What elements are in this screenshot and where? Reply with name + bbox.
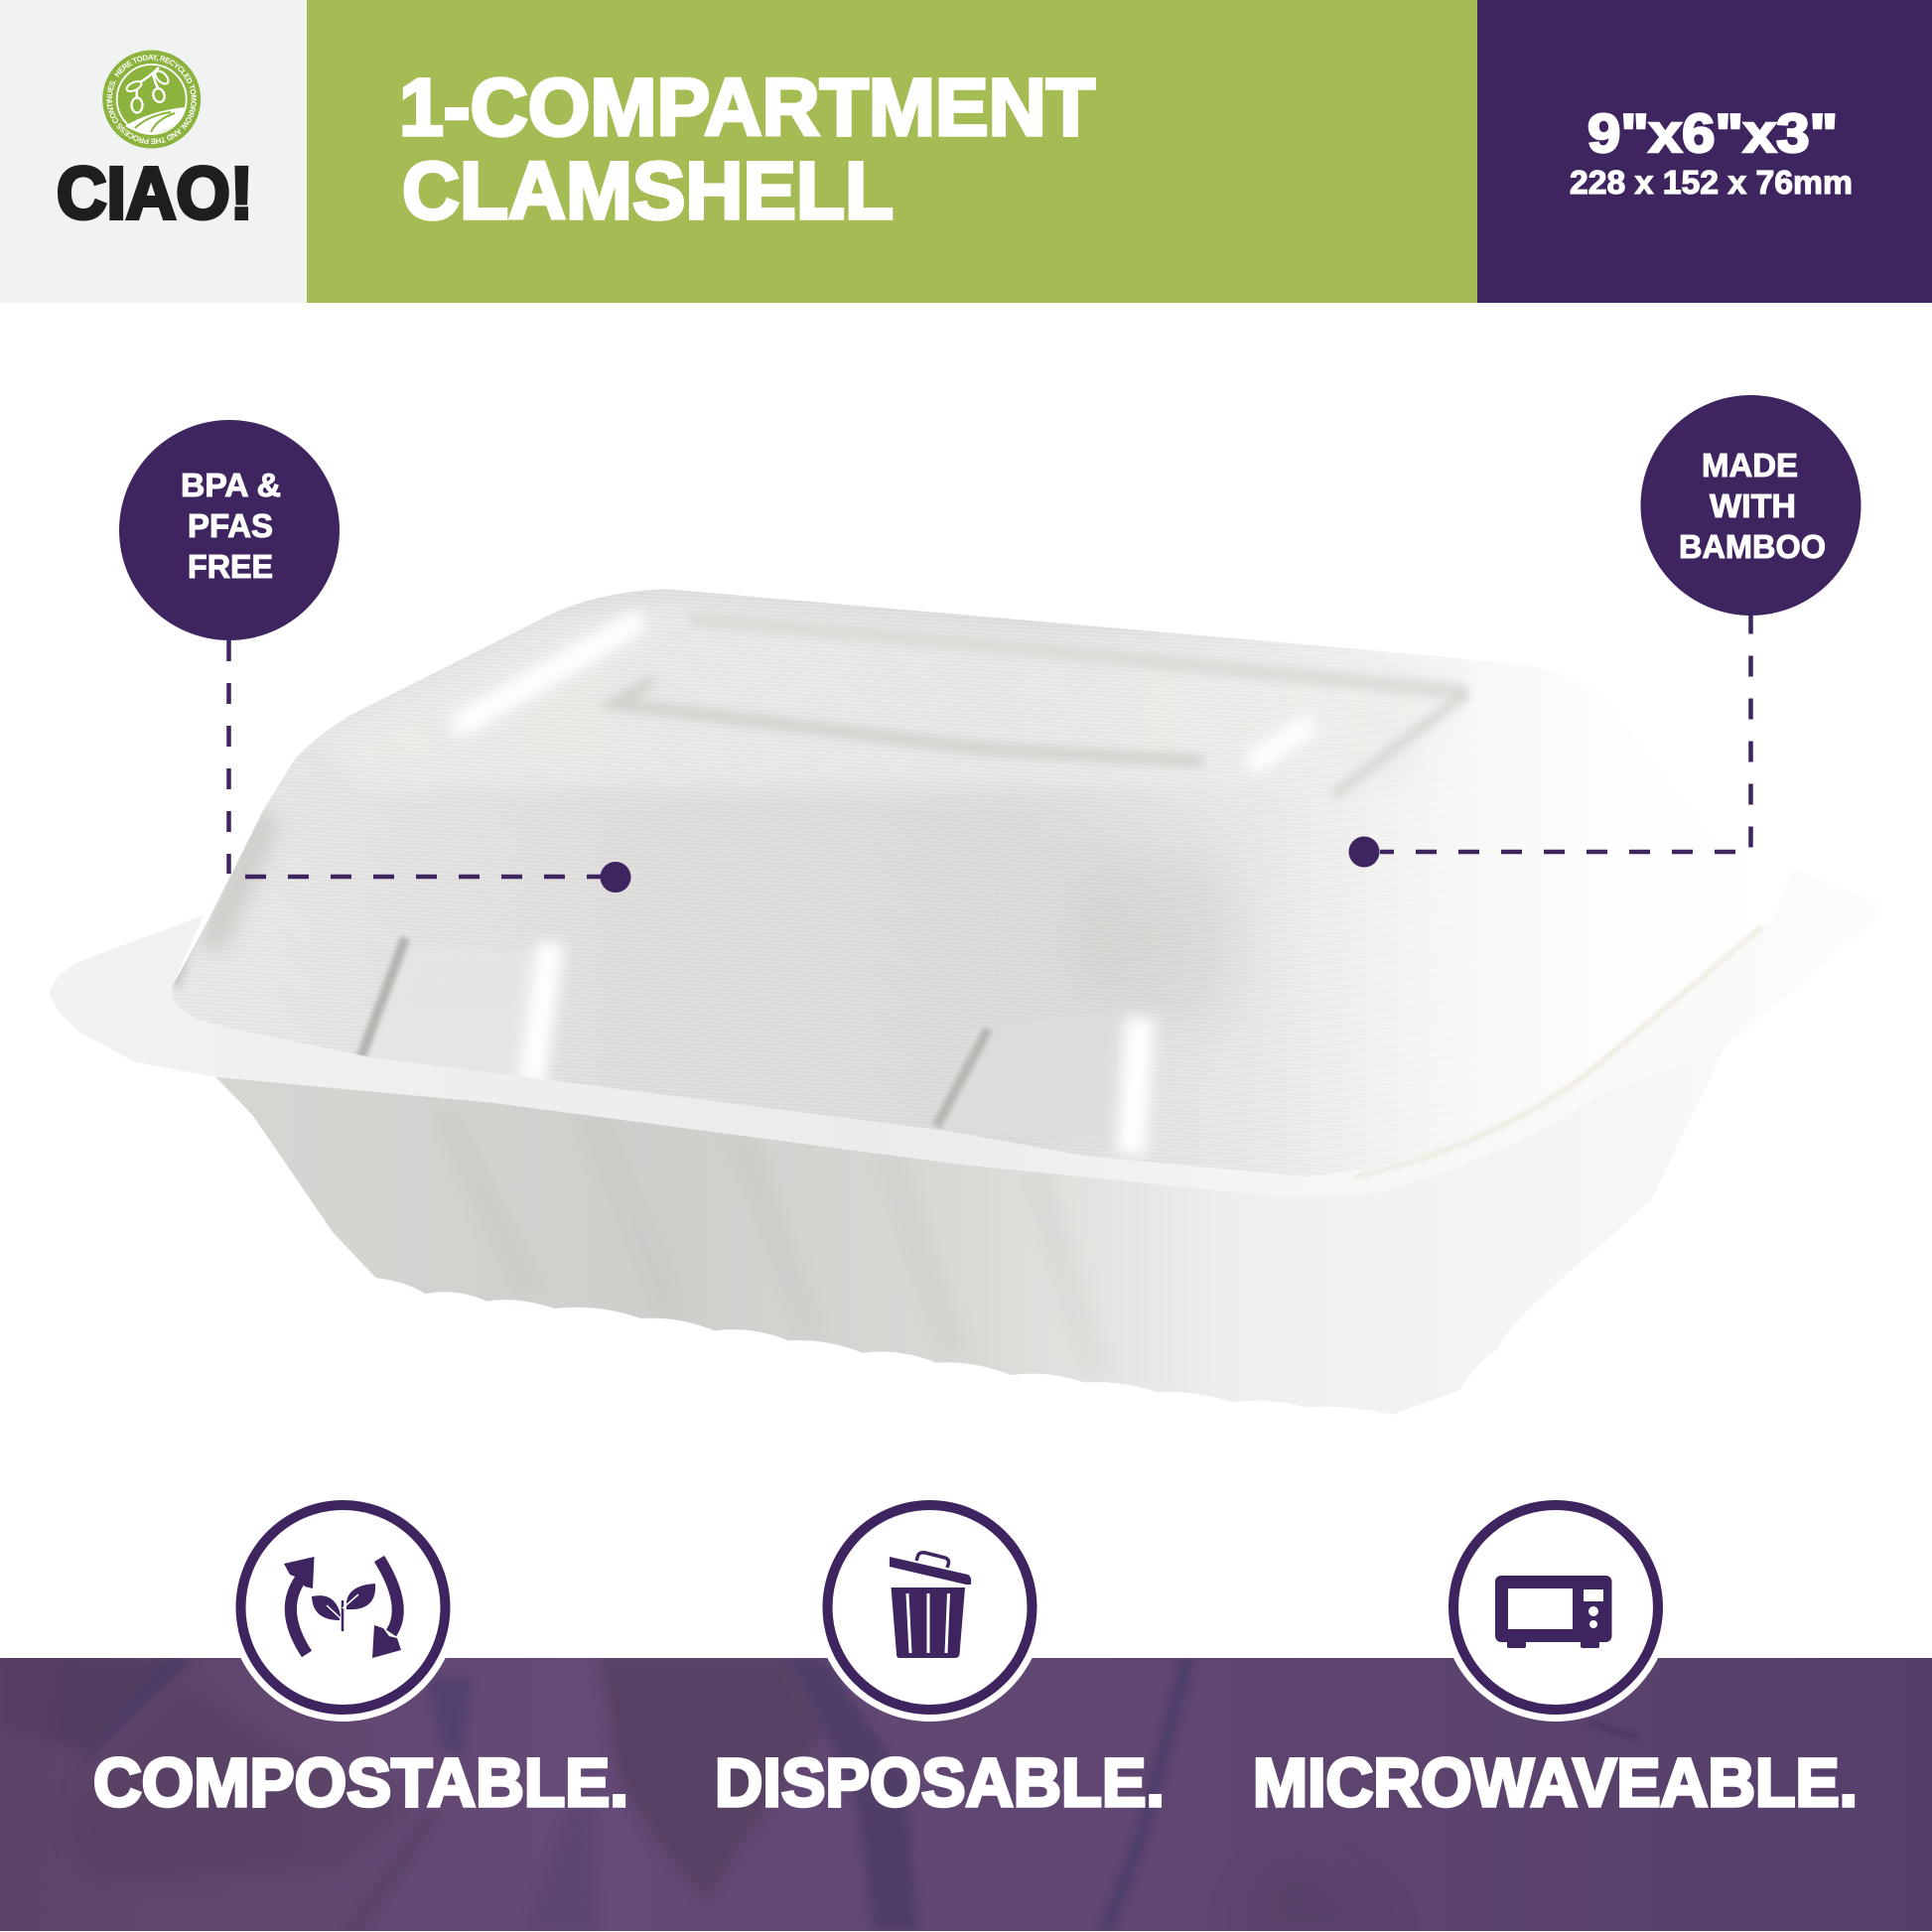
leader dot [600, 862, 631, 893]
callout text: BPA & [181, 467, 281, 503]
dimensions in inches: 9"x6"x3" [1587, 102, 1838, 164]
lid [172, 589, 1499, 1176]
callout badge [1640, 395, 1861, 616]
callout badge [119, 420, 340, 640]
leader line [1380, 614, 1751, 852]
callout text [181, 467, 281, 585]
title line 1: 1-COMPARTMENT [399, 63, 1095, 153]
callout: made with bamboo [1348, 395, 1861, 868]
logo wordmark: CIAO! [57, 152, 253, 234]
callout text [1679, 447, 1826, 565]
dimensions in millimetres: 228 x 152 x 76mm [1570, 164, 1853, 201]
callout text: MADE [1702, 447, 1798, 483]
icon badge [1442, 1493, 1670, 1722]
feature label: MICROWAVEABLE. [1253, 1744, 1858, 1821]
feature label: COMPOSTABLE. [93, 1744, 628, 1821]
footer band with leaf background [0, 1658, 1932, 1931]
logo badge: HERE TODAY, RECYCLED TOMORROW. AND THE PROCESS CONTINUES. [107, 54, 197, 145]
callout: BPA and PFAS free [119, 420, 631, 893]
icon: compost cycle with sprout [284, 1557, 401, 1658]
callout text: WITH [1710, 487, 1796, 524]
icon: microwave [1495, 1576, 1612, 1648]
callout text: PFAS [188, 507, 273, 544]
leader line [228, 640, 601, 877]
rim [50, 869, 1881, 1197]
header: logo panel [0, 0, 307, 303]
title line 2: CLAMSHELL [402, 146, 894, 236]
tray body [215, 1046, 1725, 1415]
leader dot [1348, 836, 1380, 868]
callout text: BAMBOO [1679, 528, 1826, 565]
header: title panel [307, 0, 1477, 303]
feature label: DISPOSABLE. [715, 1744, 1165, 1821]
icon badge [816, 1493, 1044, 1722]
icon badge [228, 1493, 457, 1722]
feature: disposable [715, 1493, 1165, 1821]
icon: trash can [890, 1553, 971, 1658]
feature: compostable [93, 1493, 628, 1821]
header: dimensions panel [1477, 0, 1932, 303]
callout text: FREE [188, 548, 273, 585]
tray edge shadow on right [1355, 926, 1762, 1176]
feature: microwaveable [1253, 1493, 1858, 1821]
product photo: clamshell container [50, 579, 1881, 1415]
